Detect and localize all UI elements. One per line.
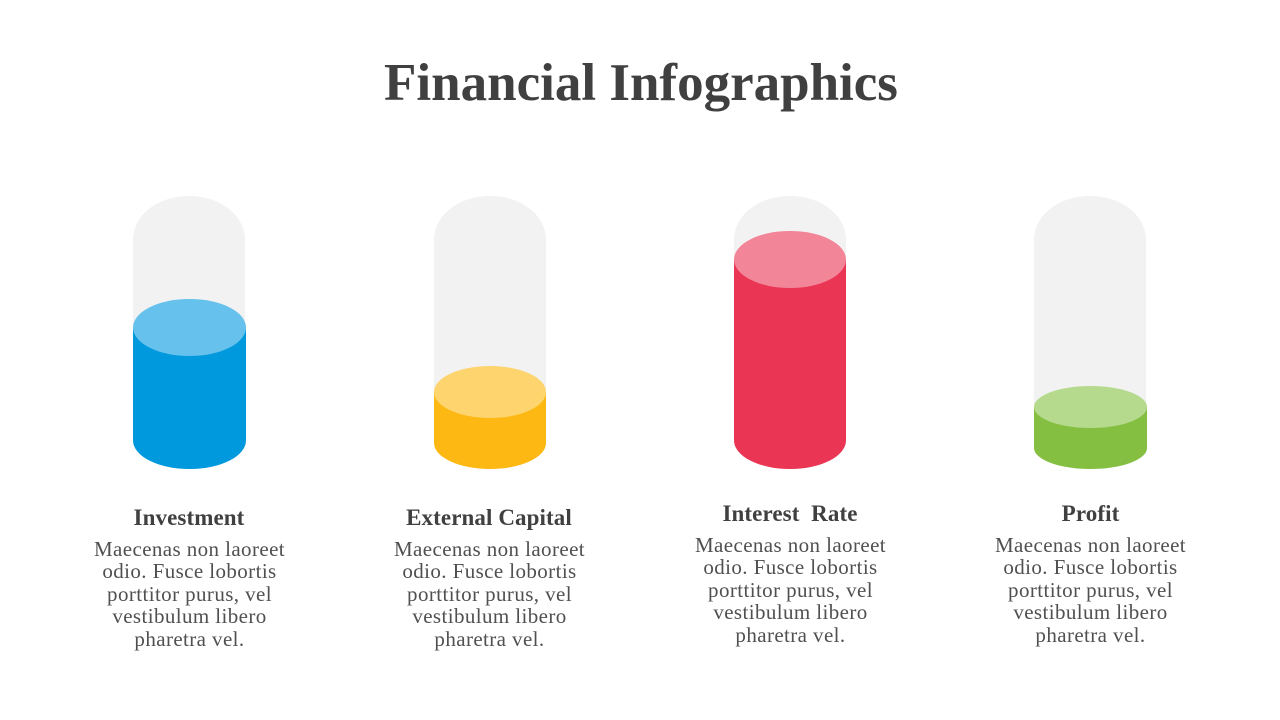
heading: profit: Profit: [1062, 501, 1119, 526]
text: interest rate: [695, 533, 886, 647]
text: profit: Maecenas non laoreet: [995, 533, 1186, 557]
text: profit: vestibulum libero: [1013, 600, 1168, 624]
text: external capital: vestibulum libero: [412, 604, 567, 628]
text: investment: Maecenas non laoreet: [94, 537, 285, 561]
text: interest rate: vestibulum libero: [713, 600, 868, 624]
heading: interest rate: Interest Rate: [722, 501, 858, 526]
text: interest rate: odio. Fusce lobortis: [703, 555, 878, 579]
text: investment: odio. Fusce lobortis: [102, 559, 277, 583]
text: investment: porttitor purus, vel: [107, 582, 272, 606]
text: profit: [995, 533, 1186, 647]
cylinder: investment: [133, 196, 246, 469]
cylinder: external capital: [434, 196, 546, 469]
text: external capital: porttitor purus, vel: [407, 582, 572, 606]
text: investment: [94, 537, 285, 651]
cylinder: interest rate: [734, 196, 846, 469]
cylinder: profit: [1034, 196, 1147, 469]
text: interest rate: pharetra vel.: [735, 623, 846, 647]
text: profit: porttitor purus, vel: [1008, 578, 1173, 602]
text: external capital: Maecenas non laoreet: [394, 537, 585, 561]
text: interest rate: porttitor purus, vel: [708, 578, 873, 602]
text: interest rate: Maecenas non laoreet: [695, 533, 886, 557]
text: external capital: [394, 537, 585, 651]
heading: investment: Investment: [134, 505, 244, 530]
text: external capital: pharetra vel.: [434, 627, 545, 651]
text: profit: odio. Fusce lobortis: [1003, 555, 1178, 579]
heading: external capital: External Capital: [406, 505, 572, 530]
text: external capital: odio. Fusce lobortis: [402, 559, 577, 583]
title: Financial Infographics: [384, 54, 898, 112]
text: profit: pharetra vel.: [1035, 623, 1146, 647]
text: investment: vestibulum libero: [112, 604, 267, 628]
text: investment: pharetra vel.: [134, 627, 245, 651]
